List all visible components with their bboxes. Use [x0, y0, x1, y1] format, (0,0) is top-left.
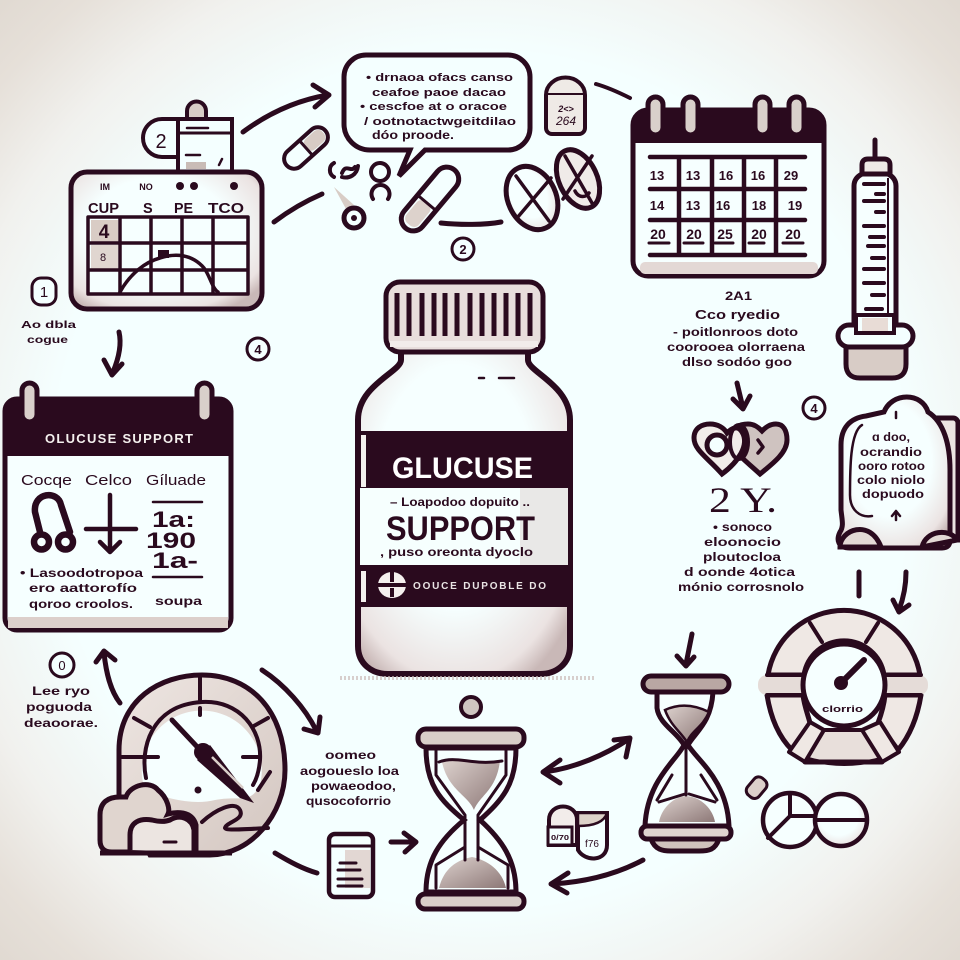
- date numbers: 19: [788, 198, 802, 213]
- label bands: [360, 431, 568, 607]
- text block: heart note: ploutocloa: [703, 550, 781, 564]
- speech bubble callout: ceafoe paoe dacao: [372, 87, 506, 99]
- icon: small labelled tags: 0/70: [551, 835, 569, 842]
- highlight dash on bottle: [479, 377, 514, 379]
- calendar card: [71, 172, 262, 309]
- icon: crossed tablet right: [548, 143, 608, 215]
- date numbers: 20: [650, 226, 666, 242]
- small label: soupa: [155, 596, 203, 608]
- arrow: calendar to speech bubble: [243, 85, 329, 132]
- label logo: [378, 572, 406, 598]
- bottle ground shadow: [340, 676, 596, 680]
- clipboard tab with number 2: 2: [155, 131, 167, 153]
- speech bubble callout: • drnaoa ofacs canso: [366, 72, 513, 84]
- text block: gauge note: powaeodoo,: [311, 781, 396, 793]
- column headings: Cocqe: [21, 473, 72, 489]
- calendar labels: PE: [174, 201, 193, 217]
- connector line and step number 2: 2: [459, 242, 467, 257]
- text block: • Lasoodotropoa: [20, 568, 144, 580]
- text block: 241 note: 2A1: [725, 289, 752, 303]
- bag text: ɑ doo,: [872, 432, 910, 444]
- text block: heart note: eloonocio: [704, 535, 781, 549]
- clouds: [100, 785, 196, 852]
- text block: heart note: • sonoco: [713, 520, 772, 534]
- step badge 0 and note: Lee ryo: [32, 686, 90, 698]
- icon: cross arrows: [86, 495, 136, 552]
- calendar labels: [88, 182, 244, 217]
- step badge 4 right: 4: [810, 401, 818, 416]
- panel: central glucose bottle: [358, 282, 570, 674]
- icon: pill bottle tag: 2<>: [557, 104, 574, 114]
- step badge 4 right: [803, 397, 825, 419]
- large figure 2 P: 2 Y.: [709, 480, 777, 520]
- icon: crossed tablet left: [496, 158, 568, 238]
- bag text: dopuodo: [862, 489, 924, 501]
- label: GLUCUSE: GLUCUSE: [392, 452, 533, 485]
- bag text: [857, 432, 925, 501]
- panel: left gauge with clouds: [100, 675, 285, 855]
- arrow: down to glucose calendar: [104, 332, 122, 375]
- text block: heart note: mónio corrosnolo: [678, 580, 804, 594]
- date numbers: 16: [751, 168, 765, 183]
- step badge 0 and note: poguoda: [26, 702, 93, 714]
- step 1 text: cogue: [27, 334, 68, 346]
- panel: right calendar: [633, 97, 824, 276]
- icon: pill bottle tag: 264: [555, 114, 576, 128]
- date numbers: 29: [784, 168, 798, 183]
- speech bubble callout: • cescfoe at o oracoe: [360, 101, 507, 113]
- text block: 241 note: - poitlonroos doto: [673, 325, 798, 339]
- text block: 241 note: coorooea olorraena: [667, 340, 805, 354]
- icon: syringe: [838, 140, 913, 378]
- calendar grid with curve: [88, 217, 248, 294]
- bag text: ooro rotoo: [858, 461, 925, 473]
- speech bubble callout: dóo proode.: [372, 130, 454, 142]
- text block: 241 note: Cco ryedio: [695, 308, 780, 322]
- date numbers: 25: [717, 226, 733, 242]
- text block: qoroo croolos.: [29, 599, 133, 611]
- speech bubble callout: [344, 55, 530, 176]
- rings: [22, 383, 212, 422]
- clipboard tab with number 2: [143, 102, 232, 173]
- text block: [20, 568, 144, 611]
- icon: capsule small: [280, 123, 332, 173]
- gauge needle: [842, 660, 864, 682]
- calendar labels: S: [143, 201, 153, 217]
- date numbers: [650, 168, 802, 242]
- icon: swirls and small figure: [330, 163, 389, 228]
- text block: gauge note: [300, 750, 400, 808]
- date grid: [650, 157, 805, 255]
- icon: right hourglass: [641, 676, 731, 851]
- text block: gauge note: oomeo: [325, 750, 376, 762]
- panel: IV bag note: [838, 397, 958, 548]
- icon: tube loop: [34, 495, 73, 550]
- calendar labels: IM: [100, 182, 110, 192]
- date numbers: 16: [719, 168, 733, 183]
- date numbers: 16: [716, 198, 730, 213]
- icon: document: [329, 834, 373, 897]
- connector line: [275, 853, 317, 873]
- date numbers: 14: [650, 198, 665, 213]
- gauge needle: [172, 720, 254, 803]
- date numbers: 13: [686, 198, 700, 213]
- label subline: , puso oreonta dyoclo: [380, 545, 533, 559]
- arrow: gauge to text: [262, 670, 320, 733]
- date numbers: 20: [785, 226, 801, 242]
- step badge 0 and note: [24, 653, 98, 730]
- text block: 241 note: dlso sodóo goo: [682, 355, 792, 369]
- step 1 text: Ao dbla: [21, 319, 76, 331]
- icon: capsule large: [396, 162, 464, 236]
- date numbers: 13: [650, 168, 664, 183]
- icon: split tablets: [763, 793, 867, 847]
- double arrow between hourglasses: [543, 738, 630, 783]
- panel: glucose support calendar: [5, 383, 231, 630]
- arrow: gauge to hourglass: [677, 634, 694, 666]
- calendar labels: TCO: [208, 201, 244, 217]
- panel: top-left chart calendar: [71, 102, 262, 309]
- text block: ero aattorofío: [29, 583, 137, 595]
- date numbers: 20: [751, 226, 767, 242]
- icon: small pill: [744, 774, 769, 801]
- connector line below arrow: [274, 194, 322, 222]
- column headings: Celco: [85, 473, 132, 489]
- arrow: note to hearts: [733, 383, 750, 409]
- step 1 text: [21, 319, 76, 346]
- bottle cap: [386, 282, 543, 352]
- step badge 0 and note: 0: [58, 658, 66, 673]
- heading: OLUCUSE SUPPORT: [45, 431, 193, 446]
- gauge label: clorrio: [822, 704, 863, 715]
- text block: gauge note: qusocoforrio: [306, 796, 391, 808]
- calendar labels: CUP: [88, 201, 119, 217]
- calendar labels: NO: [139, 182, 153, 192]
- bottle body: [358, 350, 570, 674]
- arrow: lower return: [551, 860, 643, 893]
- step badge 1: 1: [40, 284, 48, 301]
- column headings: Gíluade: [146, 473, 206, 489]
- text block: heart note: d oonde 4otica: [684, 565, 795, 579]
- speech bubble callout: / ootnotactwgeitdilao: [364, 116, 516, 128]
- date numbers: 20: [686, 226, 702, 242]
- calendar rings: [648, 97, 804, 135]
- panel: right gauge: [758, 610, 928, 764]
- label: SUPPORT: SUPPORT: [386, 510, 535, 548]
- numbers column: 1a:: [152, 507, 195, 532]
- icon: linked hearts: [694, 424, 787, 474]
- bag text: colo niolo: [857, 475, 925, 487]
- label tagline: – Loapodoo dopuito ..: [390, 497, 530, 509]
- column headings: [21, 473, 206, 489]
- step badge 0 and note: deaoorae.: [24, 718, 98, 730]
- step badge 4 left: [247, 338, 269, 360]
- date numbers: 13: [686, 168, 700, 183]
- connector to right calendar: [596, 84, 630, 98]
- icon: center hourglass: [418, 697, 524, 909]
- icon: small labelled tags: f76: [585, 839, 599, 850]
- numbers column: 1a-: [152, 548, 198, 573]
- arrows: bag to gauge: [859, 572, 909, 612]
- icon: pill bottle tag: [546, 78, 585, 134]
- label brand line: OOUCE DUPOBLE DO: [413, 581, 546, 592]
- numbers column: 190: [146, 528, 196, 553]
- connector line and step number 2: [441, 222, 501, 260]
- text block: heart note: [678, 520, 804, 594]
- step 1 note: [21, 278, 76, 346]
- date numbers: 18: [752, 198, 766, 213]
- text block: 241 note: [667, 289, 805, 369]
- step badge 4 left: 4: [254, 342, 262, 357]
- numbers column: [146, 502, 202, 577]
- arrow: document to hourglass: [391, 833, 416, 852]
- icon: small labelled tags: [548, 806, 607, 858]
- bag text: ocrandio: [860, 447, 922, 459]
- text block: gauge note: aogoueslo loa: [300, 766, 400, 778]
- calendar grid with curve: 8: [100, 252, 106, 264]
- arrow: gauge up to calendar: [96, 651, 120, 703]
- calendar grid with curve: 4: [99, 222, 110, 243]
